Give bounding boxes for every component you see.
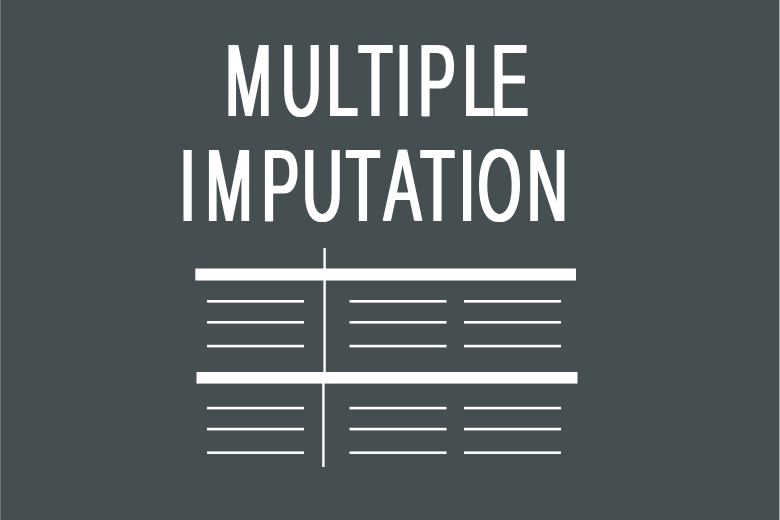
icon: data table — [195, 248, 578, 467]
table vertical divider — [322, 248, 326, 467]
title line 2: IMPUTATION — [180, 128, 567, 243]
lower row lines — [207, 407, 561, 454]
table middle rule — [196, 372, 578, 384]
upper row lines — [207, 300, 561, 347]
title — [180, 23, 567, 243]
title line 1: MULTIPLE — [225, 23, 529, 138]
table header rule — [195, 268, 576, 280]
